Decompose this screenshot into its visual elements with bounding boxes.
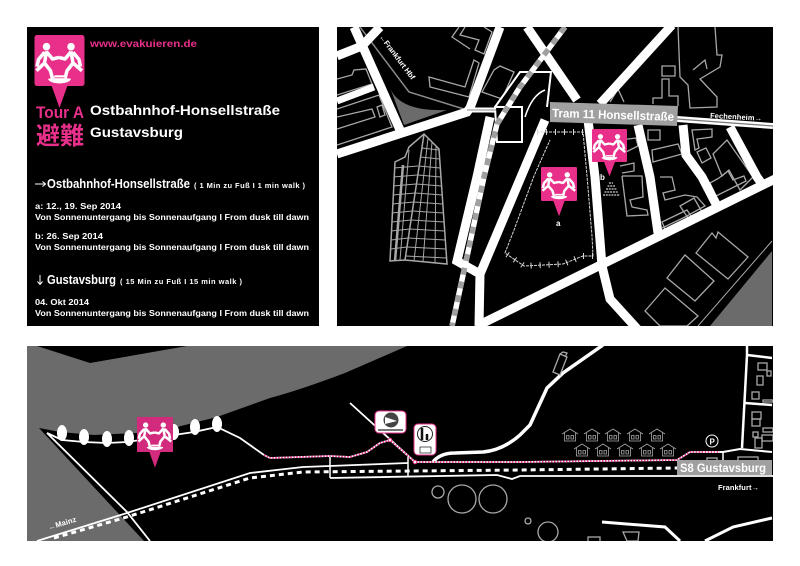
sign: ship bbox=[375, 411, 406, 433]
circular tanks bbox=[432, 485, 558, 542]
section heading: Ostbahnhof: Ostbahnhof-Honsellstraße bbox=[47, 177, 190, 191]
river bbox=[27, 346, 407, 541]
tour label: Tour A bbox=[36, 103, 84, 122]
parking sign: P bbox=[710, 438, 716, 446]
park triangle bbox=[389, 85, 447, 125]
hours c: Von Sonnenuntergang bis Sonnenaufgang I From dusk till dawn bbox=[35, 308, 309, 318]
walking time 1: ( 1 Min zu Fuß I 1 min walk ) bbox=[194, 181, 306, 190]
panel: Gustavsburg map bbox=[27, 345, 773, 543]
tram tracks bbox=[677, 119, 773, 126]
label: Fechenheim: Fechenheim→ bbox=[710, 111, 762, 123]
houses bbox=[562, 429, 676, 456]
parking sign bbox=[706, 435, 718, 447]
title: Gustavsburg: Gustavsburg bbox=[90, 124, 183, 140]
other buildings bbox=[553, 352, 773, 543]
panel: info bbox=[27, 27, 319, 326]
date b: b: 26. Sep 2014 bbox=[35, 231, 103, 241]
tram stop label: Tram 11 Honsellstraße bbox=[552, 106, 675, 124]
icon: evacuation marker logo bbox=[34, 35, 84, 108]
buildings bbox=[337, 27, 772, 326]
bridge bbox=[495, 72, 551, 142]
roads and paths bbox=[47, 345, 772, 541]
tower building bbox=[390, 134, 447, 264]
park fence bbox=[505, 132, 593, 266]
walking time 2: ( 15 Min zu Fuß I 15 min walk ) bbox=[120, 277, 242, 286]
walking route bbox=[264, 438, 720, 464]
marker bbox=[137, 417, 173, 468]
website url: www.evakuieren.de bbox=[89, 38, 197, 50]
marker b bbox=[592, 129, 627, 176]
label: Mainz: ←Mainz bbox=[47, 515, 78, 532]
marker a bbox=[541, 167, 577, 216]
panel: Ostbahnhof map bbox=[337, 25, 775, 332]
roads bbox=[337, 25, 775, 332]
railway bbox=[37, 457, 773, 541]
date a: a: 12., 19. Sep 2014 bbox=[35, 201, 121, 211]
title: Ostbahnhof-Honsellstrasse: Ostbahnhof-Honsellstraße bbox=[90, 102, 280, 118]
icon: pyramid of stones bbox=[603, 183, 620, 195]
trees bbox=[57, 416, 222, 447]
railway bbox=[452, 27, 565, 326]
label a: a bbox=[556, 219, 561, 228]
label b: b bbox=[600, 173, 605, 182]
thin track bbox=[360, 27, 494, 112]
label: Frankfurt Hbf: ←Frankfurt Hbf bbox=[377, 33, 417, 82]
hours b: Von Sonnenuntergang bis Sonnenaufgang I From dusk till dawn bbox=[35, 242, 309, 252]
S8 station label: S8 Gustavsburg bbox=[680, 461, 766, 475]
date c: 04. Okt 2014 bbox=[35, 297, 89, 307]
sign: pedestrians bbox=[414, 424, 436, 455]
hours a: Von Sonnenuntergang bis Sonnenaufgang I From dusk till dawn bbox=[35, 212, 309, 222]
section heading: Gustavsburg: Gustavsburg bbox=[47, 273, 116, 287]
chinese title: 避難 bbox=[36, 123, 84, 150]
label: Frankfurt: Frankfurt→ bbox=[718, 483, 759, 492]
